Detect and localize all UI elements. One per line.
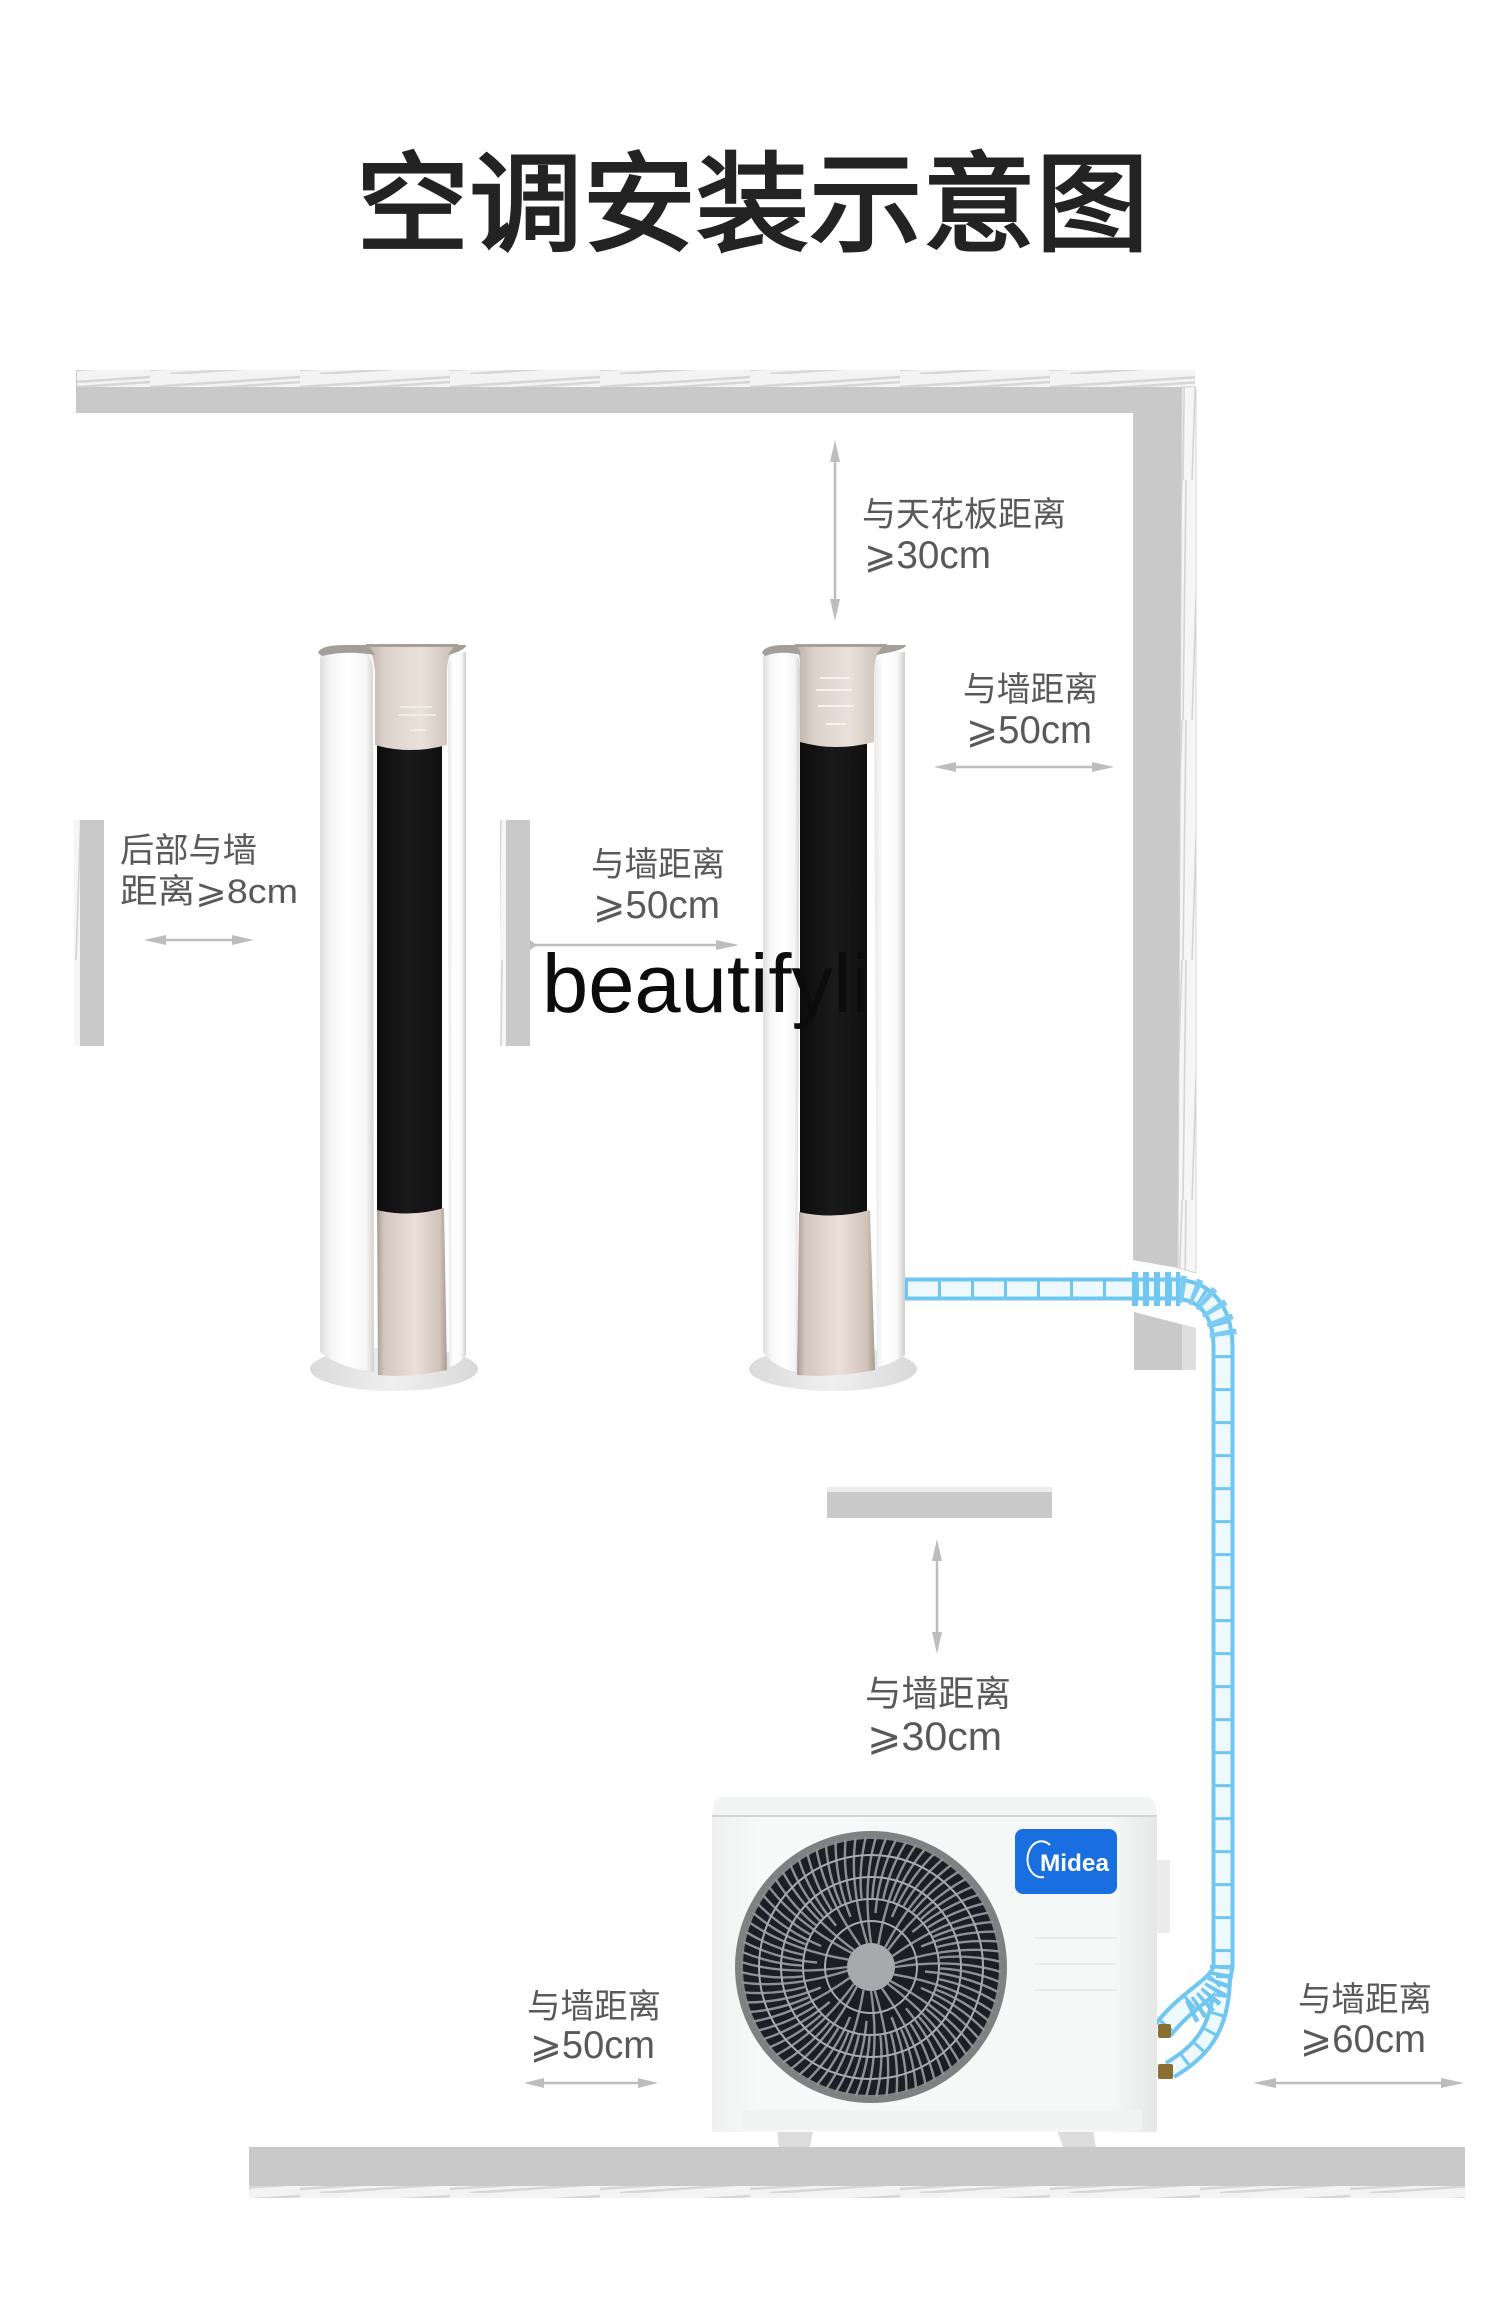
label: right wall clearance: 与墙距离 (963, 671, 1098, 709)
label: outdoor left clearance: ⩾50cm (530, 2024, 655, 2067)
label: ceiling clearance (862, 496, 1066, 577)
fan grille (717, 1813, 1025, 2121)
label: side clearance (591, 846, 725, 927)
watermark: beautifyli (542, 937, 870, 1030)
ceiling and right wall (76, 370, 1196, 1273)
arrow: right wall clearance (934, 762, 1114, 772)
indoor unit left (310, 644, 478, 1391)
Midea logo: Midea (1040, 1850, 1110, 1877)
Midea logo (1015, 1829, 1117, 1894)
label: right wall clearance (963, 671, 1098, 752)
brass ports (1158, 2024, 1173, 2079)
label: rear clearance (120, 832, 298, 911)
label: outdoor left clearance: 与墙距离 (527, 1988, 661, 2026)
label: outdoor rear clearance: ⩾30cm (867, 1715, 1002, 1759)
title: 空调安装示意图 (356, 118, 1149, 274)
label: ceiling clearance: 与天花板距离 (862, 496, 1066, 534)
label: outdoor rear clearance: 与墙距离 (865, 1673, 1011, 1714)
arrow: ceiling clearance (830, 440, 840, 621)
label: rear clearance: 距离⩾8cm (120, 873, 298, 911)
refrigerant pipe (905, 1289, 1224, 2070)
label: ceiling clearance: ⩾30cm (864, 534, 991, 577)
outdoor unit (712, 1797, 1173, 2147)
label: rear clearance: 后部与墙 (120, 832, 257, 870)
lower wall segment with pipe hole (1134, 1312, 1196, 1370)
label: outdoor left clearance (527, 1988, 661, 2067)
arrow: outdoor right clearance (1253, 2078, 1464, 2088)
arrow: outdoor rear clearance (932, 1539, 942, 1654)
rear wall piece left (74, 820, 104, 1046)
label: outdoor right clearance: 与墙距离 (1298, 1981, 1432, 2019)
rear wall piece middle (500, 820, 530, 1046)
label: side clearance: ⩾50cm (593, 884, 720, 927)
label: right wall clearance: ⩾50cm (966, 709, 1092, 752)
arrow: side clearance (530, 940, 739, 950)
label: side clearance: 与墙距离 (591, 846, 725, 884)
wall piece above outdoor unit (827, 1487, 1052, 1518)
label: outdoor right clearance (1298, 1981, 1432, 2061)
floor (249, 2147, 1465, 2198)
label: outdoor right clearance: ⩾60cm (1300, 2018, 1426, 2061)
label: outdoor rear clearance (865, 1673, 1011, 1759)
indoor unit right (749, 644, 917, 1391)
arrow: outdoor left clearance (524, 2078, 658, 2088)
arrow: rear clearance (144, 935, 254, 945)
